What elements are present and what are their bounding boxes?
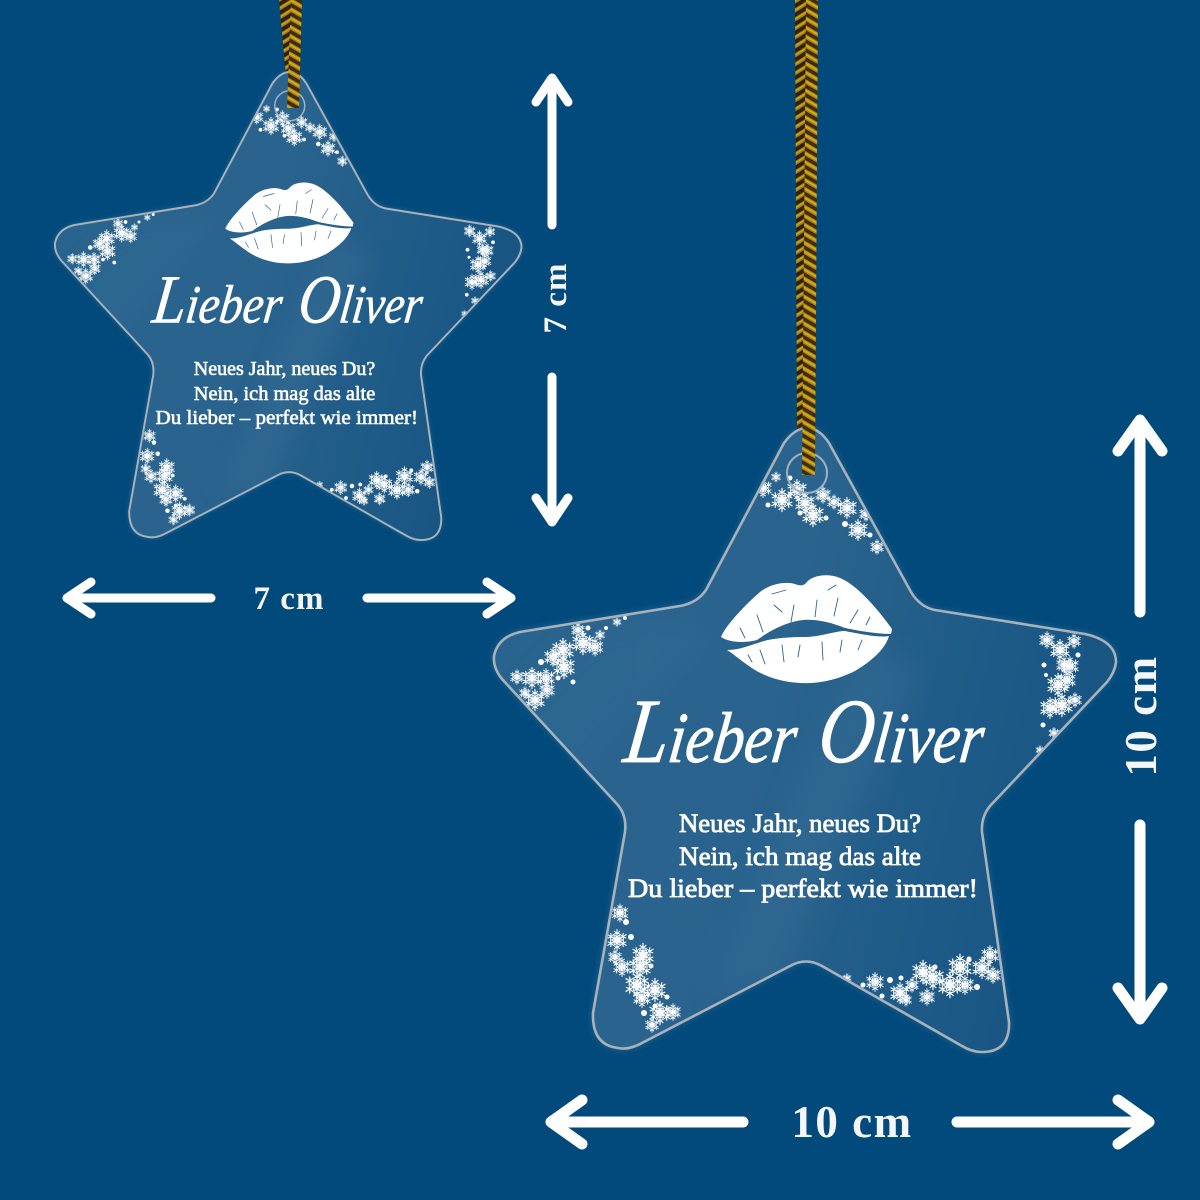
name: Oliver	[814, 680, 992, 782]
snowflakes	[66, 105, 497, 526]
arrow: small height up	[536, 78, 568, 225]
arrow: large height down	[1118, 825, 1162, 1019]
arrow: small width left	[67, 582, 211, 614]
verse: Du lieber – perfekt wie immer!	[156, 408, 418, 429]
label: small height: 7 cm	[538, 263, 574, 333]
label: large height: 10 cm	[1116, 655, 1166, 777]
sheen	[286, 256, 351, 382]
edge and hole	[494, 428, 1116, 1052]
name: Lieber	[618, 680, 805, 782]
glow	[55, 72, 522, 540]
large cord front	[802, 0, 818, 475]
arrow: large width right	[957, 1100, 1149, 1144]
arrow: small height down	[536, 377, 568, 522]
arrow: large width left	[551, 1100, 743, 1144]
sheen	[797, 674, 888, 890]
glass body	[494, 428, 1116, 1052]
arrow: large height up	[1118, 420, 1162, 612]
verse: Neues Jahr, neues Du?	[194, 359, 375, 380]
small cord front	[287, 0, 302, 108]
name	[618, 680, 992, 782]
small star ornament	[55, 72, 522, 540]
glow	[494, 428, 1116, 1052]
name: Lieber	[148, 261, 288, 337]
verse: Nein, ich mag das alte	[679, 842, 921, 871]
label: large width: 10 cm	[791, 1097, 913, 1147]
glass body	[55, 72, 522, 540]
edge and hole	[55, 72, 522, 540]
name	[148, 261, 429, 337]
small cord back	[279, 0, 291, 76]
verse: Du lieber – perfekt wie immer!	[628, 874, 978, 903]
large cord back	[795, 0, 807, 440]
label: small width: 7 cm	[254, 581, 324, 617]
verse: Nein, ich mag das alte	[194, 384, 375, 405]
verse	[628, 809, 978, 903]
arrow: small width right	[367, 582, 511, 614]
verse	[156, 359, 418, 429]
lips	[225, 182, 354, 263]
large star ornament	[494, 428, 1116, 1052]
snowflakes	[509, 472, 1083, 1033]
name: Oliver	[295, 261, 429, 337]
lips	[721, 575, 892, 683]
verse: Neues Jahr, neues Du?	[679, 809, 921, 838]
